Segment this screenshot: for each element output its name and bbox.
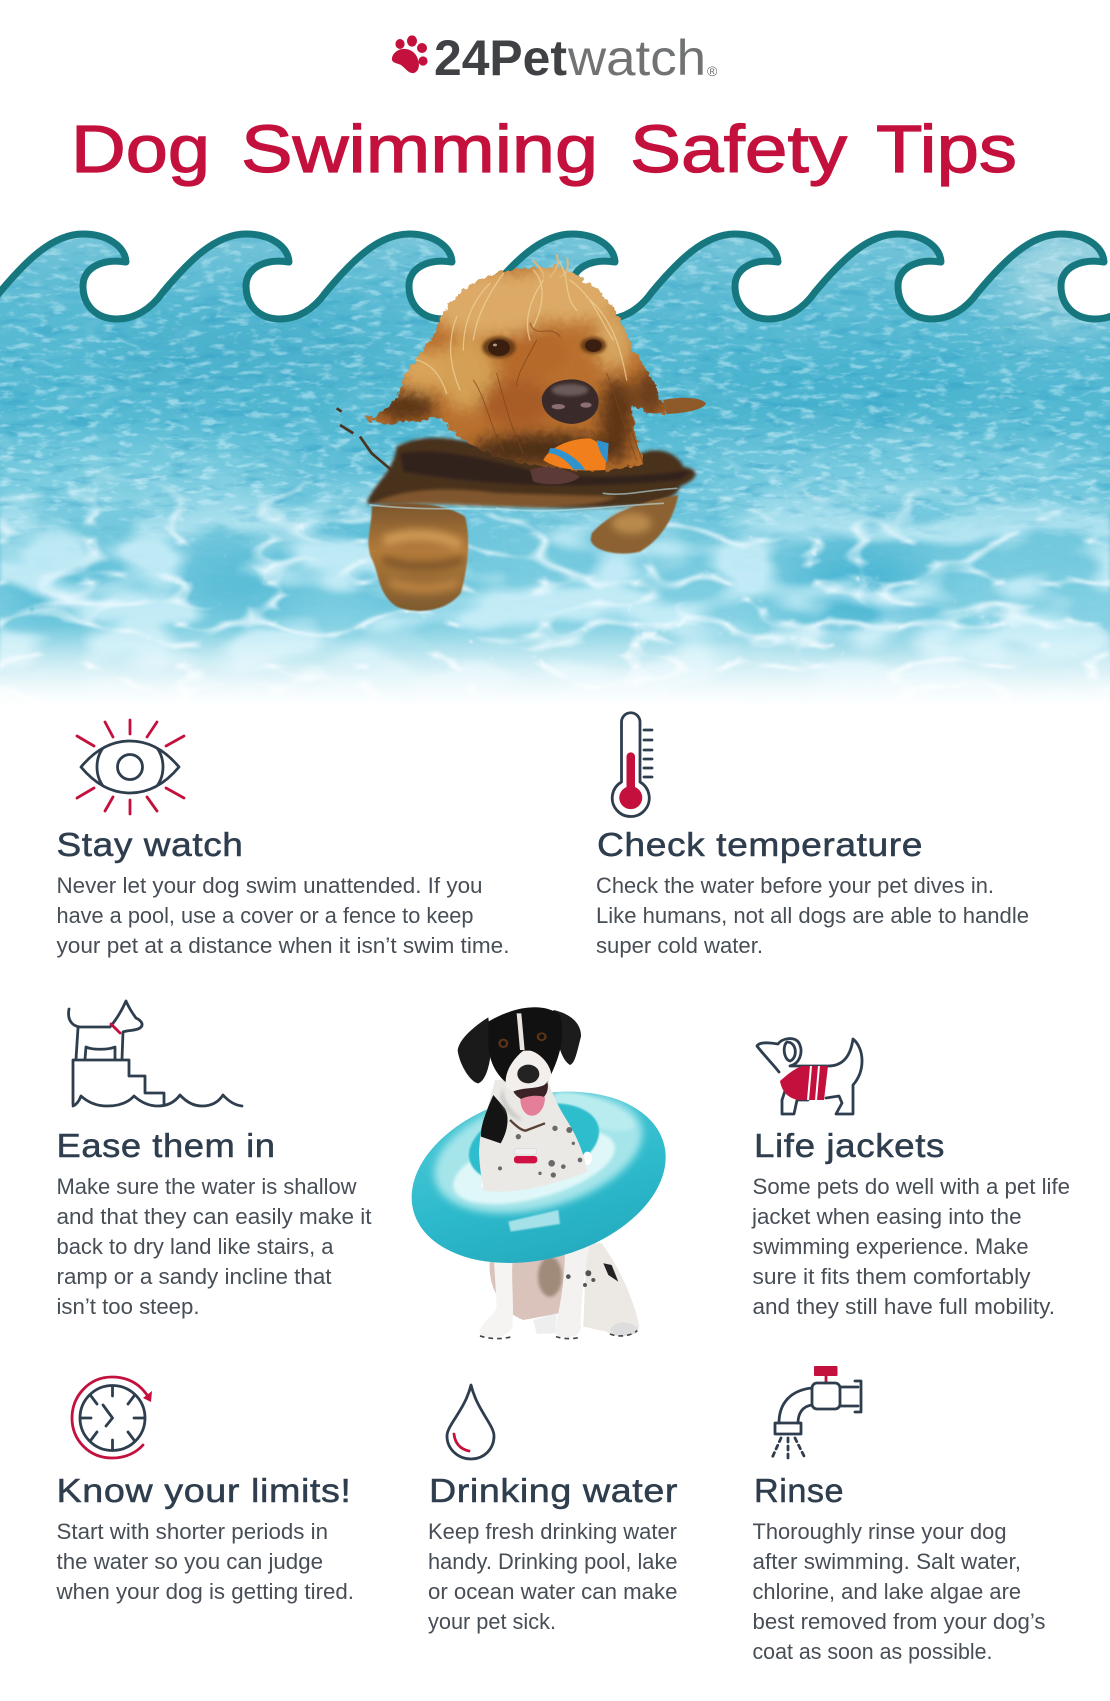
body text: when your dog is getting tired.: [55, 1579, 354, 1604]
back of dog: [663, 398, 706, 414]
body text: handy. Drinking pool, lake: [428, 1549, 678, 1574]
heading: Ease them in: [56, 1127, 276, 1164]
panel: stay watch: [56, 720, 510, 958]
body text: Keep fresh drinking water: [428, 1519, 677, 1544]
panel: life jackets: [751, 1039, 1070, 1319]
body text: best removed from your dog’s: [752, 1609, 1046, 1634]
body text: sure it fits them comfortably: [752, 1264, 1030, 1289]
body text: [751, 1174, 1070, 1319]
body text: super cold water.: [596, 933, 763, 958]
body text: after swimming. Salt water,: [752, 1549, 1021, 1574]
body text: ramp or a sandy incline that: [56, 1264, 332, 1289]
body text: [596, 873, 1029, 958]
heading: Rinse: [754, 1472, 844, 1509]
body text: isn’t too steep.: [56, 1294, 200, 1319]
icon: paw: [392, 35, 428, 73]
heading: Check temperature: [597, 826, 923, 863]
panel: ease them in: [56, 1001, 372, 1319]
logo: 24Petwatch: watch: [567, 30, 706, 86]
body text: jacket when easing into the: [751, 1204, 1022, 1229]
logo: 24Petwatch: ®: [707, 63, 718, 79]
ball: [543, 438, 609, 471]
body text: [752, 1519, 1046, 1664]
submerged body: [367, 438, 696, 508]
panel: check temperature: [596, 713, 1029, 958]
body text: chlorine, and lake algae are: [752, 1579, 1021, 1604]
body text: coat as soon as possible.: [752, 1639, 992, 1664]
body text: swimming experience. Make: [752, 1234, 1028, 1259]
icon: dog in red life jacket: [757, 1039, 862, 1114]
body text: Start with shorter periods in: [56, 1519, 328, 1544]
body text: back to dry land like stairs, a: [56, 1234, 334, 1259]
body text: and that they can easily make it: [56, 1204, 372, 1229]
nose: [542, 379, 599, 424]
photo: swimming dog with ball: [337, 253, 706, 611]
light ripples over body: [370, 488, 677, 511]
heading: Know your limits!: [56, 1472, 352, 1509]
body text: and they still have full mobility.: [752, 1294, 1055, 1319]
icon: dog on stairs: [69, 1001, 242, 1106]
logo wordmark: 24Pet: [434, 30, 567, 86]
heading: Drinking water: [429, 1472, 678, 1509]
wave border: [0, 205, 1110, 319]
submerged left leg: [369, 503, 468, 611]
body text: Thoroughly rinse your dog: [752, 1519, 1006, 1544]
body text: your pet sick.: [428, 1609, 556, 1634]
body text: Never let your dog swim unattended. If you: [56, 873, 483, 898]
body text: [56, 1174, 372, 1319]
panel: drinking water: [428, 1385, 678, 1634]
heading: Life jackets: [754, 1127, 945, 1164]
icon: thermometer: [612, 713, 652, 817]
title: Tips: [876, 112, 1017, 187]
body text: [56, 873, 510, 958]
panel: know your limits: [55, 1377, 354, 1604]
logo: 24Petwatch: [392, 30, 718, 86]
icon: water drop: [447, 1385, 494, 1459]
heading: Stay watch: [56, 826, 243, 863]
panel: rinse: [752, 1366, 1046, 1664]
title: Dog: [71, 112, 210, 187]
title: [71, 112, 1017, 187]
photo: dog in inflatable ring: [412, 1007, 666, 1340]
fur strands: [417, 255, 643, 463]
body text: Check the water before your pet dives in.: [596, 873, 994, 898]
dog lower body: [479, 1243, 639, 1339]
water reflection below chin: [530, 467, 580, 484]
body text: [55, 1519, 354, 1604]
body text: have a pool, use a cover or a fence to keep: [56, 903, 474, 928]
body text: your pet at a distance when it isn’t swim time.: [56, 933, 510, 958]
body text: Make sure the water is shallow: [56, 1174, 357, 1199]
submerged right leg: [591, 495, 678, 554]
dog chest and head: [458, 1007, 587, 1192]
body text: Like humans, not all dogs are able to handle: [596, 903, 1029, 928]
body text: the water so you can judge: [56, 1549, 323, 1574]
body text: Some pets do well with a pet life: [752, 1174, 1070, 1199]
body text: or ocean water can make: [428, 1579, 678, 1604]
inflatable ring: [412, 1092, 666, 1263]
icon: faucet: [772, 1366, 861, 1458]
dark water edge marks: [337, 408, 393, 472]
title: Safety: [630, 112, 848, 187]
icon: clock with red arrow: [72, 1377, 152, 1458]
icon: eye with red rays: [77, 720, 184, 814]
hero photo: pool water with wave border and swimming dog: [0, 205, 1110, 715]
eyes: [482, 337, 606, 358]
body text: [428, 1519, 678, 1634]
head: [364, 264, 666, 472]
title: Swimming: [241, 112, 598, 187]
water background: [0, 225, 1110, 715]
